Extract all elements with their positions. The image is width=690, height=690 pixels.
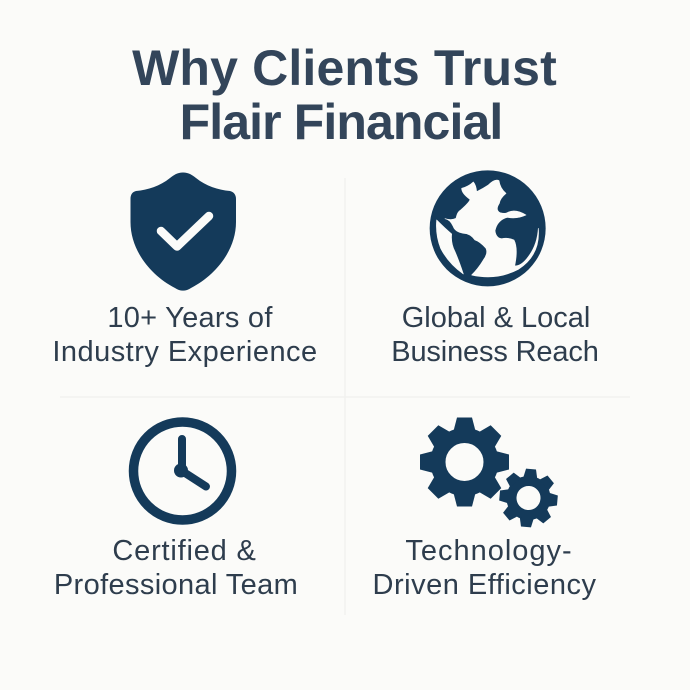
icon: globe <box>430 170 546 286</box>
title: Flair Financial <box>180 94 502 150</box>
label: efficiency: Technology- <box>405 535 573 567</box>
label: reach: Business Reach <box>391 336 599 368</box>
icon: shield with check mark <box>130 172 236 291</box>
label: team: Certified & <box>112 535 257 567</box>
label: efficiency: Driven Efficiency <box>373 569 596 601</box>
small gear <box>497 467 560 529</box>
label: team: Professional Team <box>54 569 298 601</box>
label: experience: Industry Experience <box>52 336 318 368</box>
title <box>132 40 557 150</box>
label: efficiency <box>373 535 596 601</box>
label: experience: 10+ Years of <box>107 302 273 334</box>
label: reach <box>391 302 599 368</box>
label: reach: Global & Local <box>402 302 590 334</box>
icon: gears <box>420 418 560 529</box>
label: team <box>54 535 298 601</box>
title: Why Clients Trust <box>132 40 557 96</box>
label: experience <box>52 302 318 368</box>
large gear <box>420 418 509 506</box>
icon: clock <box>134 422 232 520</box>
